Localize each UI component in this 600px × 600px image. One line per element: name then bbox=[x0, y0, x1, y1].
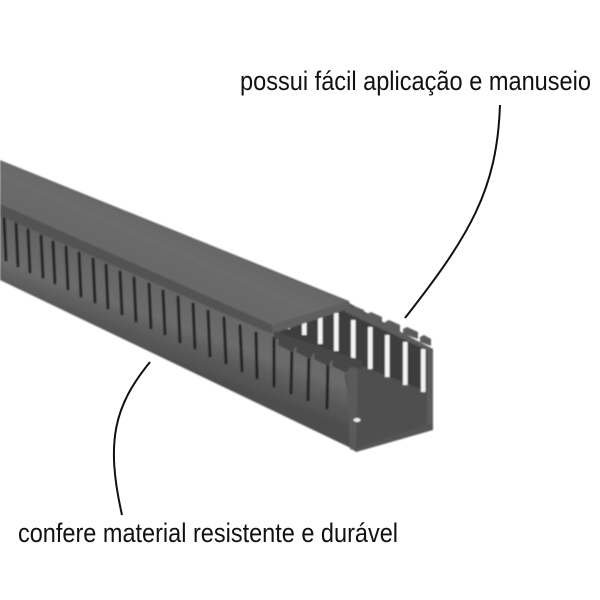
callout line: application bbox=[405, 105, 500, 318]
interior of duct bbox=[272, 303, 433, 450]
side wall slots bbox=[4, 218, 328, 408]
right wall end fingers bbox=[345, 305, 433, 426]
left side wall bbox=[0, 205, 355, 450]
end face of left wall and floor bbox=[346, 366, 358, 451]
mounting hole bbox=[354, 418, 360, 422]
product: wire duct bbox=[0, 160, 433, 452]
label: material: confere material resistente e durável bbox=[18, 518, 398, 548]
inner wall slots bbox=[286, 311, 426, 392]
top cover bbox=[0, 160, 351, 334]
left wall finger tips bbox=[274, 331, 362, 373]
callout line: material bbox=[114, 362, 150, 515]
